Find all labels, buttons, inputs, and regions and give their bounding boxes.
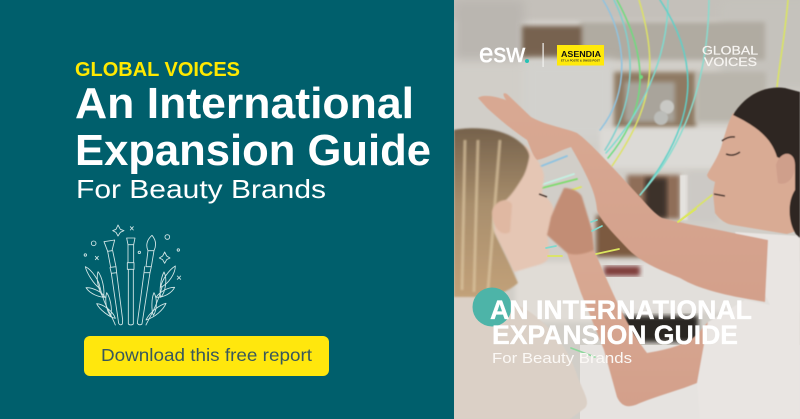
hair: right woman <box>733 87 800 238</box>
cover subtitle: For Beauty Brands <box>492 351 632 367</box>
photo: blurred salon background <box>440 0 800 419</box>
cover title: EXPANSION GUIDE <box>492 320 738 350</box>
logo: Global Voices: GLOBAL <box>702 44 758 58</box>
face: blonde woman <box>494 145 554 272</box>
ear: right woman <box>776 154 795 184</box>
cover title <box>490 300 752 344</box>
panel: teal left background <box>0 0 454 419</box>
facial details <box>714 137 740 196</box>
hair: blonde woman <box>454 128 529 297</box>
photo: people <box>454 87 800 419</box>
eyebrow: Global Voices: GLOBAL VOICES <box>75 59 240 81</box>
shirt: right woman <box>695 232 800 419</box>
logo: Asendia: ASENDIA <box>561 50 601 59</box>
heading: An International Expansion Guide: Expansion Guide <box>75 126 431 175</box>
logo: esw <box>480 48 529 63</box>
button: download this free report <box>84 336 329 376</box>
face: right woman <box>707 113 800 234</box>
logo: Asendia <box>557 45 604 66</box>
decorative arcs <box>539 0 788 222</box>
shirt: blonde woman <box>454 296 587 419</box>
heading: An International Expansion Guide: An International <box>75 79 414 128</box>
button: download this free report: Download this free report <box>101 345 312 365</box>
icon: makeup brushes with leaves <box>84 225 181 325</box>
arm: raised arm with hand <box>478 93 768 302</box>
logo: Global Voices <box>702 46 758 66</box>
logo: Asendia: ET LA POSTE & SWISS POST <box>561 58 600 62</box>
hand: holding brush <box>547 188 594 254</box>
hair highlights <box>462 140 500 292</box>
logo: Global Voices: VOICES <box>704 55 757 69</box>
panel: cover photo <box>440 0 800 419</box>
divider between logos <box>542 43 544 67</box>
subheading: For Beauty Brands: For Beauty Brands <box>76 174 326 204</box>
logo: esw: esw <box>479 38 525 68</box>
small arc fragments between figures <box>546 209 696 357</box>
arm: lower arm with elbow <box>567 250 708 406</box>
heading: An International Expansion Guide <box>75 79 431 175</box>
accent circle <box>472 288 512 326</box>
ear: blonde woman <box>492 200 512 234</box>
cover title: AN INTERNATIONAL <box>490 295 752 325</box>
eye: blonde woman <box>539 194 547 197</box>
